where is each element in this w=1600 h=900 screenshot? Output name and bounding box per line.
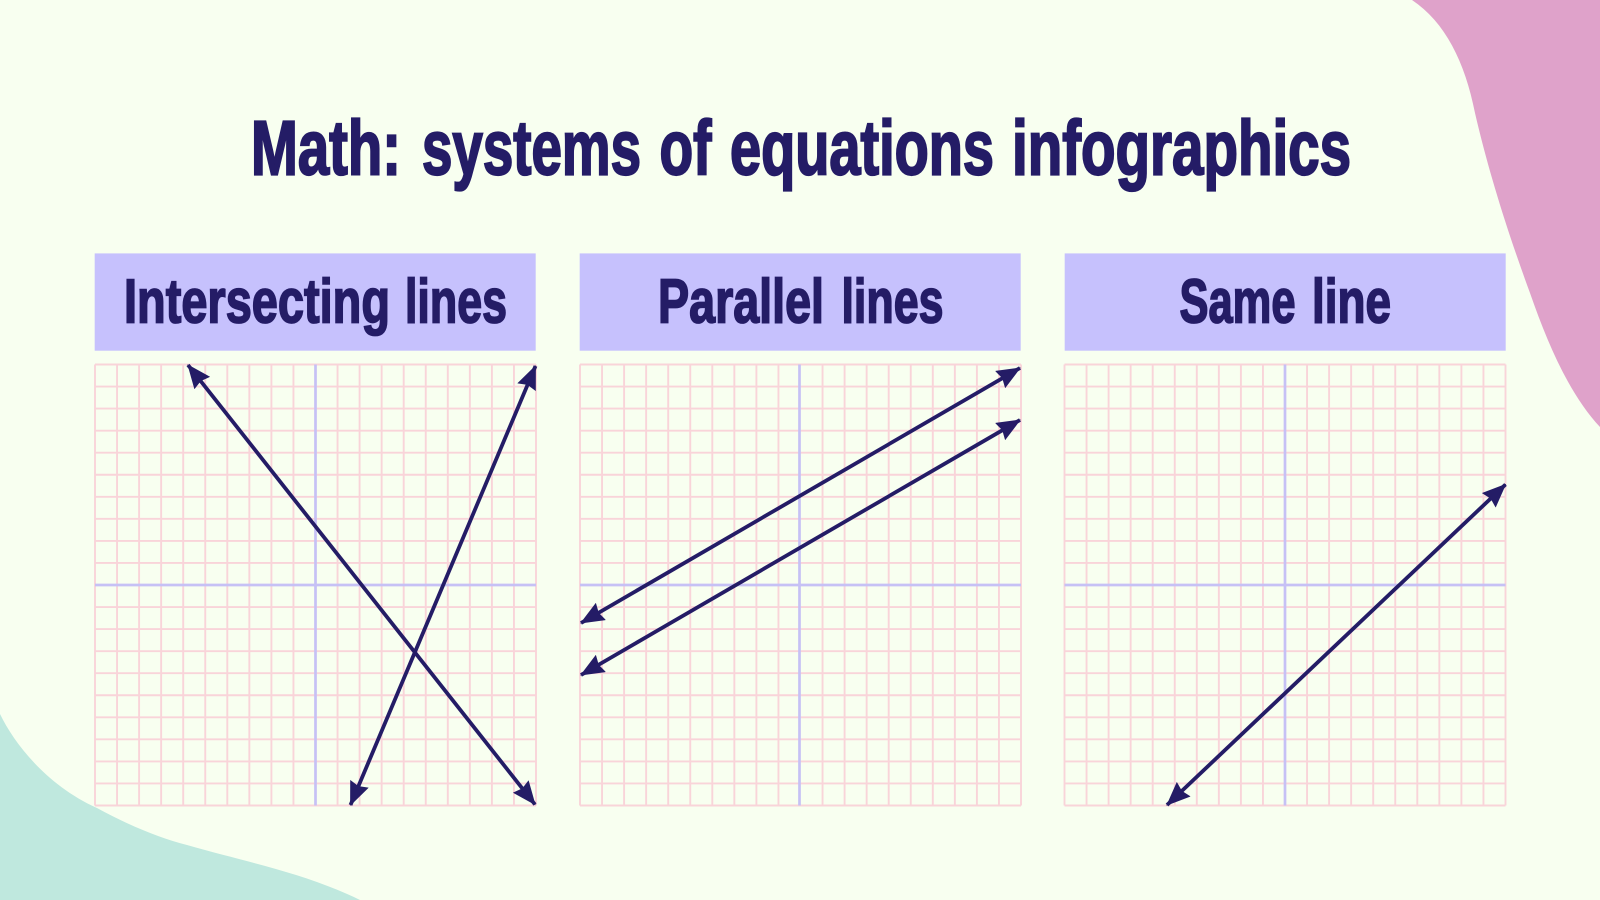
title: equations xyxy=(730,106,994,192)
title: Math: xyxy=(251,106,401,192)
chart: intersecting lines graph xyxy=(95,364,536,806)
heading: parallel lines xyxy=(580,253,1021,351)
panel: intersecting lines xyxy=(95,253,536,805)
title: systems xyxy=(422,106,641,192)
heading: intersecting lines: lines xyxy=(405,268,507,336)
chart: parallel lines graph xyxy=(580,364,1021,806)
heading: parallel lines: lines xyxy=(842,268,944,336)
panel: parallel lines xyxy=(580,253,1021,805)
decorative blob: teal bottom left xyxy=(0,714,360,900)
heading: same line xyxy=(1065,253,1506,351)
heading: same line: line xyxy=(1312,268,1391,336)
title: infographics xyxy=(1012,106,1351,192)
title: of xyxy=(660,106,712,192)
panel: same line xyxy=(1064,253,1506,805)
heading: intersecting lines: Intersecting xyxy=(124,268,390,336)
decorative blob: pink top right xyxy=(1412,0,1600,427)
heading: same line: Same xyxy=(1180,268,1296,336)
heading: intersecting lines xyxy=(95,253,536,351)
title xyxy=(251,106,1351,192)
heading: parallel lines: Parallel xyxy=(658,268,824,336)
chart: same line graph xyxy=(1064,364,1506,806)
